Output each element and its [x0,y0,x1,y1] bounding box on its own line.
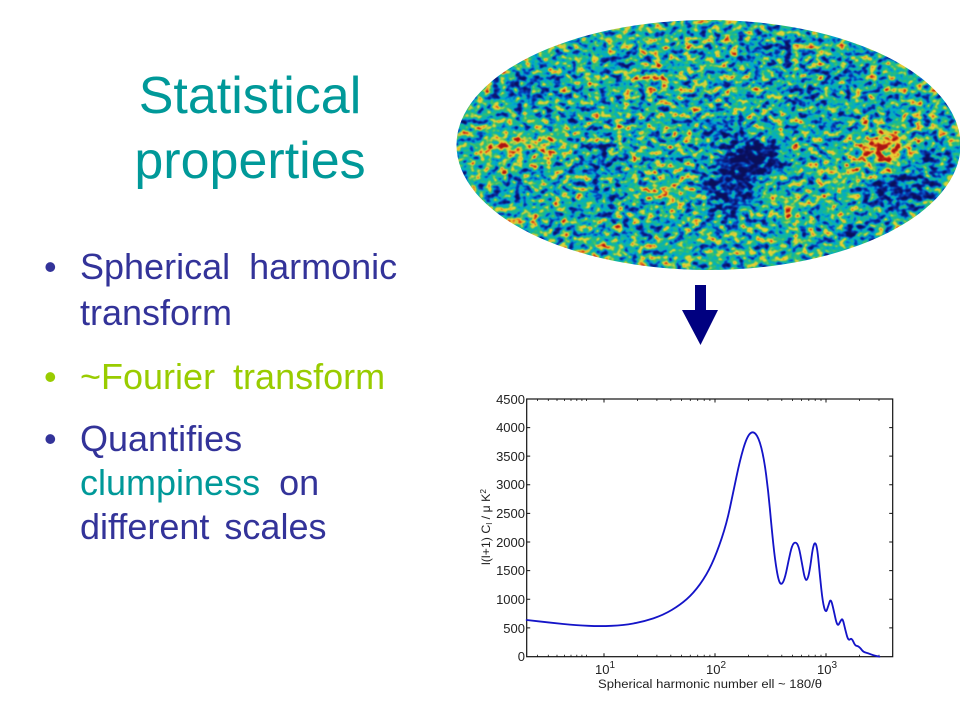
y axis tick labels: 3500 [496,449,525,464]
y axis title: / μ K [479,494,493,523]
title: properties [134,132,366,190]
bullet: quantifies clumpiness: • [44,418,57,459]
x axis title: Spherical harmonic number ell ~ 180/θ [598,679,822,691]
y axis tick labels: 2500 [496,506,525,521]
x axis tick labels: 3 [831,660,837,671]
plot frame and ticks [527,399,893,657]
bullet: fourier transform: ~Fourier transform [80,356,385,397]
x axis tick labels [595,660,837,677]
y axis title: l [485,523,494,525]
x axis tick labels: 2 [720,660,726,671]
power spectrum chart [479,392,894,691]
bullet: quantifies clumpiness: Quantifies [80,418,242,459]
x axis tick labels: 10 [706,662,720,677]
bullet: quantifies clumpiness: clumpiness on [80,462,319,503]
y axis title: 2 [479,488,488,494]
sky map: CMB temperature ellipse [456,20,960,270]
y axis tick labels: 2000 [496,535,525,550]
bullet list [44,246,397,547]
bullet: spherical harmonic transform: Spherical harmonic [80,246,397,287]
y axis tick labels: 500 [503,621,525,636]
y axis tick labels: 0 [518,649,525,664]
bullet: fourier transform: • [44,356,57,397]
x axis tick labels: 10 [817,662,831,677]
bullet: quantifies clumpiness: different scales [80,506,326,547]
title: Statistical [139,67,361,125]
bullet: spherical harmonic transform: • [44,246,57,287]
y axis tick labels: 1500 [496,563,525,578]
y axis tick labels: 4500 [496,392,525,407]
y axis tick labels [496,392,525,664]
power spectrum curve [527,432,879,657]
y axis tick labels: 3000 [496,477,525,492]
x axis tick labels: 1 [609,660,615,671]
bullet: spherical harmonic transform [44,246,397,333]
x axis tick labels: 10 [595,662,609,677]
bullet: quantifies clumpiness [44,418,326,547]
y axis tick labels: 4000 [496,420,525,435]
bullet: spherical harmonic transform: transform [80,292,232,333]
y axis tick labels: 1000 [496,592,525,607]
arrow pointing down [682,285,718,345]
y axis title: l(l+1) C [479,526,493,565]
title [134,67,366,190]
